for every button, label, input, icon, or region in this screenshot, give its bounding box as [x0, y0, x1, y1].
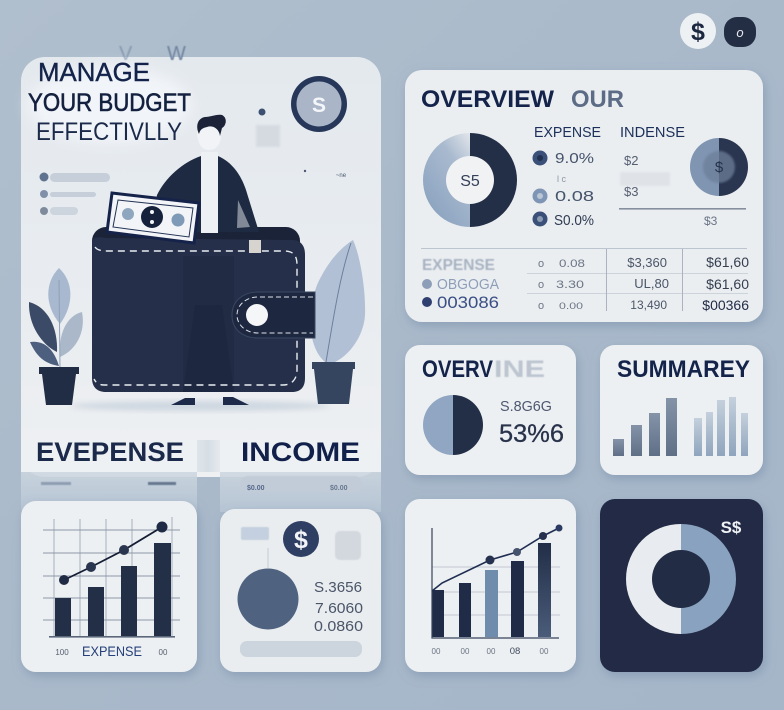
icon: dollar coin: [291, 76, 347, 132]
summary table: 003086: [437, 293, 499, 312]
pie chart: [423, 395, 483, 455]
summary table: 0.08: [559, 258, 585, 270]
legend columns: 0.08: [555, 188, 594, 205]
values: 7.6060: [315, 600, 363, 617]
blurred top heading remnant: V: [119, 43, 133, 65]
summary table: $00366: [702, 297, 749, 313]
icon: dollar badge: [283, 521, 319, 557]
heading: overview our: [421, 86, 624, 113]
donut chart: [423, 133, 517, 227]
values: S.8G6G: [500, 398, 552, 415]
axis labels: 00: [487, 647, 496, 656]
axis label: EXPENSE: [82, 643, 142, 659]
summary table: UL,80: [634, 276, 669, 291]
bars: [432, 543, 551, 637]
small pie chart: [690, 138, 748, 196]
panel: overview card: [405, 70, 763, 322]
donut chart: S5: [460, 173, 480, 190]
illustration: shoes: [171, 397, 249, 405]
summary table: $61,60: [706, 276, 749, 292]
currency label: S$: [721, 518, 742, 537]
illustration: plant left: [29, 268, 83, 405]
heading: income: INCOME: [241, 437, 360, 467]
heading: manage your budget effectively: MANAGE: [38, 57, 150, 87]
heading: SUMMAREY: [617, 356, 750, 383]
illustration: wallet back: [92, 227, 300, 267]
illustration: plant right: [310, 240, 365, 404]
legend columns: $2: [624, 153, 638, 168]
blurred top heading remnant: W: [167, 43, 186, 65]
heading: overview our: OVERVIEW: [421, 86, 554, 113]
icon: dollar coin: S: [312, 94, 326, 117]
heading: expense: EVEPENSE: [36, 437, 184, 467]
pie chart: [238, 568, 298, 630]
bars: [55, 543, 171, 636]
summary table: 3.30: [556, 279, 584, 291]
values: [314, 579, 363, 635]
faded strip under headings: $0.00: [330, 485, 348, 492]
heading: [422, 356, 545, 383]
faded background icon: [256, 108, 347, 179]
bullet list placeholder: [40, 172, 110, 215]
panel: dark donut: [600, 499, 763, 672]
summary table: [421, 248, 749, 313]
summary table: $3,360: [627, 255, 667, 270]
donut chart: [626, 524, 736, 634]
legend columns: l c: [557, 174, 566, 184]
summary table: o: [538, 279, 544, 291]
legend columns: 9.0%: [555, 150, 594, 167]
faded tabs: [241, 527, 361, 568]
icon: dark badge: o: [736, 25, 744, 40]
legend columns: S0.0%: [554, 212, 594, 229]
summary table: EXPENSE: [422, 257, 495, 274]
panel: budget hero: [21, 43, 381, 477]
legend columns: $3: [624, 184, 638, 199]
summary table: OBGOGA: [437, 276, 499, 293]
panel: overview small: [405, 345, 576, 475]
illustration: person: [150, 115, 259, 405]
values: 53%6: [499, 420, 564, 448]
summary table: 0.00: [559, 301, 583, 311]
legend columns: $3: [704, 214, 718, 228]
heading: manage your budget effectively: [28, 57, 192, 146]
axis label: [55, 643, 168, 659]
axis labels: 08: [510, 646, 520, 657]
axis label: 100: [55, 648, 69, 657]
summary table: 13,490: [630, 298, 667, 312]
panel: line bar chart: [405, 499, 576, 672]
icon: dollar badge: $: [691, 18, 705, 46]
faded background icon: ~ne: [336, 173, 347, 179]
bar chart light: [694, 397, 748, 456]
panel: income: [220, 509, 381, 672]
summary table: $61,60: [706, 254, 749, 270]
grid: [432, 567, 560, 615]
values: [499, 398, 564, 448]
panel: summary: [600, 345, 763, 475]
faded strip under headings: $0.00: [247, 485, 265, 492]
values: S.3656: [314, 579, 362, 596]
faded strip under headings: [21, 472, 381, 512]
icon: dollar badge: $: [294, 526, 308, 554]
axis labels: [432, 646, 549, 657]
top icons: [680, 13, 756, 49]
summary table: o: [538, 300, 544, 312]
bar chart dark: [613, 398, 677, 456]
axis labels: 00: [461, 647, 470, 656]
illustration: wallet front: [92, 237, 315, 392]
heading: overview our: OUR: [571, 86, 624, 113]
axes: [432, 528, 559, 638]
grid: [43, 517, 180, 636]
values: 0.0860: [314, 618, 363, 635]
heading: OVERV: [422, 356, 493, 383]
legend columns: [532, 124, 746, 229]
progress bar: [240, 641, 362, 657]
heading: manage your budget effectively: EFFECTIVLLY: [36, 118, 182, 146]
axis label: 00: [159, 648, 168, 657]
trend line: [432, 524, 562, 591]
small pie chart: $: [715, 159, 724, 176]
heading: INE: [494, 356, 545, 383]
axis labels: 00: [540, 647, 549, 656]
summary table: o: [538, 258, 544, 270]
heading: manage your budget effectively: YOUR BUDGET: [28, 89, 191, 117]
legend columns: INDENSE: [620, 124, 685, 141]
blurred top heading remnant: [119, 43, 186, 65]
panel: expense chart: [21, 501, 197, 672]
illustration: banknote: [107, 193, 199, 243]
legend columns: EXPENSE: [534, 124, 601, 141]
trend line: [59, 522, 168, 585]
axis labels: 00: [432, 647, 441, 656]
